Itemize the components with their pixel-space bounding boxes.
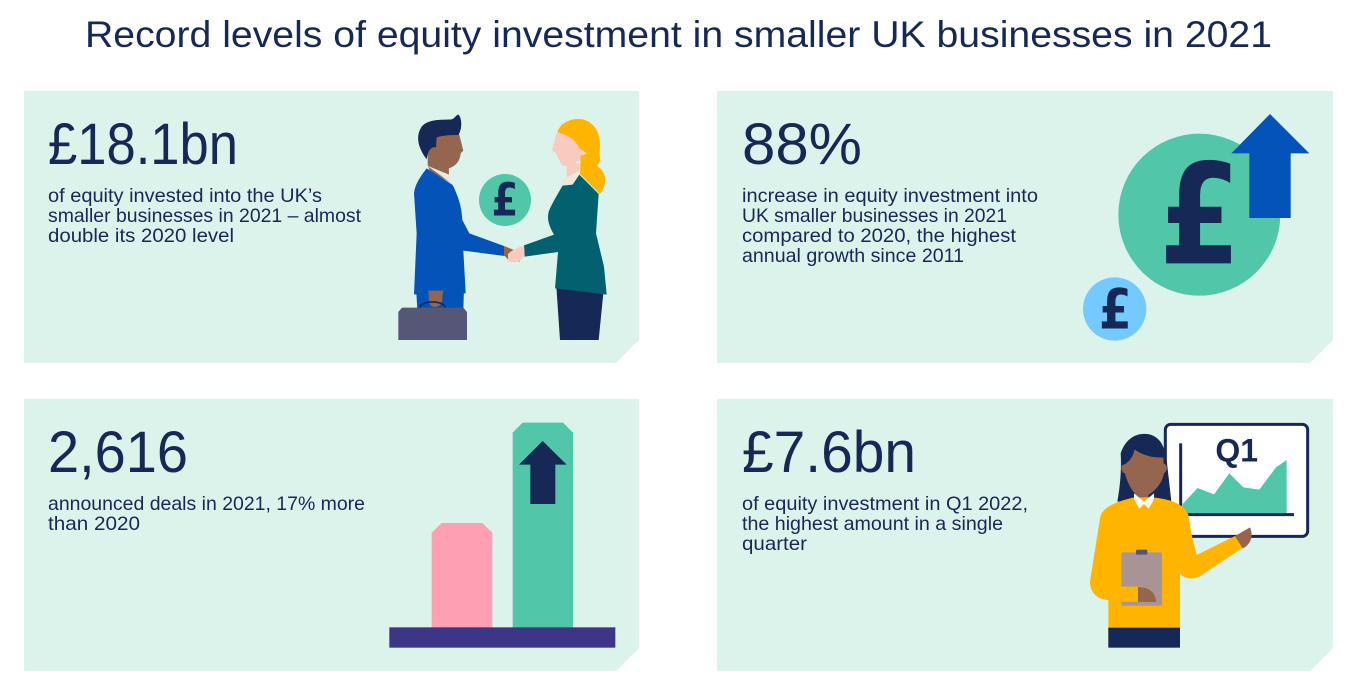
text block: £18.1bn description: double its 2020 level: [48, 225, 234, 247]
bar: 2020: [432, 523, 492, 628]
text block: £7.6bn description: quarter: [742, 533, 808, 555]
pound coin: [479, 174, 531, 227]
text block: 2,616 description: announced deals in 2021, 17% more: [48, 493, 365, 515]
presentation board: [1165, 424, 1308, 536]
text block: 88% description: UK smaller businesses in 2021: [742, 205, 1007, 227]
text block: 88% description: [742, 185, 1038, 267]
stat: 2,616: 2,616: [48, 420, 188, 485]
clipboard: [1108, 550, 1162, 606]
large pound coin: £: [1159, 134, 1241, 296]
text block: £18.1bn description: smaller businesses in 2021 – almost: [48, 205, 362, 227]
text block: 88% description: compared to 2020, the highest: [742, 225, 1017, 247]
bar chart: deals rising: [389, 423, 615, 648]
panel: £7.6bn in Q1 2022: [717, 399, 1333, 671]
panel: £18.1bn invested: [24, 91, 639, 363]
text block: 2,616 description: than 2020: [48, 513, 140, 535]
illustration: presenter with Q1 chart: [1090, 424, 1308, 648]
man: [414, 115, 520, 310]
presentation board: Q1: [1215, 433, 1258, 469]
icon: two people shaking hands over a pound coin: [398, 115, 607, 340]
text block: £7.6bn description: [742, 493, 1028, 555]
stat: 88%: 88%: [742, 112, 862, 177]
text block: 2,616 description: [48, 493, 365, 535]
title: Record levels of equity investment in smaller UK businesses in 2021: [85, 14, 1272, 55]
panel: 88% increase: [717, 91, 1333, 363]
up arrow: [1231, 114, 1309, 218]
text block: £7.6bn description: the highest amount in a single: [742, 513, 1003, 535]
text block: 88% description: annual growth since 2011: [742, 245, 964, 267]
text block: £7.6bn description: of equity investment in Q1 2022,: [742, 493, 1028, 515]
baseline: [389, 627, 615, 648]
large pound coin: [1118, 134, 1280, 296]
text block: 88% description: increase in equity investment into: [742, 185, 1038, 207]
text block: £18.1bn description: of equity invested into the UK’s: [48, 185, 322, 207]
presenter: [1090, 434, 1252, 648]
bar: 2021: [513, 423, 573, 628]
pound coin: £: [492, 174, 518, 227]
small pound coin: £: [1099, 279, 1132, 343]
panel: 2,616 deals: [24, 399, 639, 671]
small pound coin: [1083, 277, 1146, 343]
briefcase: [398, 302, 467, 340]
text block: £18.1bn description: [48, 185, 362, 247]
up arrow: [519, 441, 567, 504]
stat: £7.6bn: £7.6bn: [742, 420, 916, 485]
woman: [508, 119, 607, 340]
stat: £18.1bn: £18.1bn: [48, 112, 238, 177]
icon: pound coins with up arrow: [1083, 114, 1309, 343]
